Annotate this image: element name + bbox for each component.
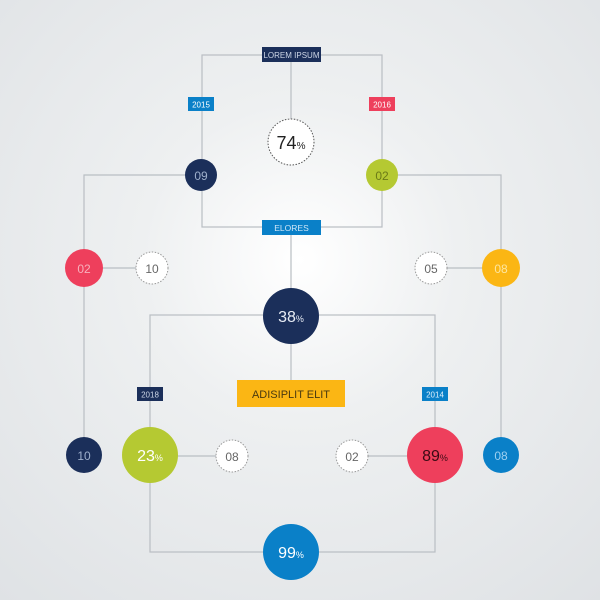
circle: 74% [268,119,314,165]
circle: 08 dotted [216,440,248,472]
circle: 23%: 23% [137,448,163,465]
circle: 02 red: 02 [77,262,91,276]
circle: 02 red [65,249,103,287]
label: 2016: 2016 [373,100,391,110]
label: lorem ipsum: LOREM IPSUM [263,51,320,60]
label: 2014: 2014 [426,390,444,400]
label: 2016 [369,97,395,111]
label: adisiplit elit [237,380,345,407]
circle: 02 lime: 02 [375,169,389,183]
circle: 08 blue [483,437,519,473]
circle: 38% [263,288,319,344]
label: 2015 [188,97,214,111]
circle: 10 navy: 10 [77,449,91,463]
circle: 05 dotted: 05 [424,262,438,276]
circle: 10 dotted [136,252,168,284]
circle: 02 lime [366,159,398,191]
label: 2015: 2015 [192,100,210,110]
circle: 08 yellow: 08 [494,262,508,276]
circle: 38%: 38% [278,309,304,326]
circle: 08 blue: 08 [494,449,508,463]
label: 2018: 2018 [141,390,159,400]
circle: 08 dotted: 08 [225,450,239,464]
label: 2014 [422,387,448,401]
circle: 08 yellow [482,249,520,287]
circle: 89% [407,427,463,483]
label: 2018 [137,387,163,401]
circle: 99%: 99% [278,545,304,562]
circle: 74%: 74% [277,133,306,153]
circle: 10 navy [66,437,102,473]
label: elores: ELORES [274,223,309,233]
label: lorem ipsum [262,47,321,62]
circle: 02 dotted [336,440,368,472]
circle: 89%: 89% [422,448,448,465]
circle: 09: 09 [194,169,208,183]
circle: 02 dotted: 02 [345,450,359,464]
label: elores [262,220,321,235]
circle: 09 [185,159,217,191]
circle: 05 dotted [415,252,447,284]
circle: 99% [263,524,319,580]
label: adisiplit elit: ADISIPLIT ELIT [252,389,330,401]
circle: 23% [122,427,178,483]
circle: 10 dotted: 10 [145,262,159,276]
